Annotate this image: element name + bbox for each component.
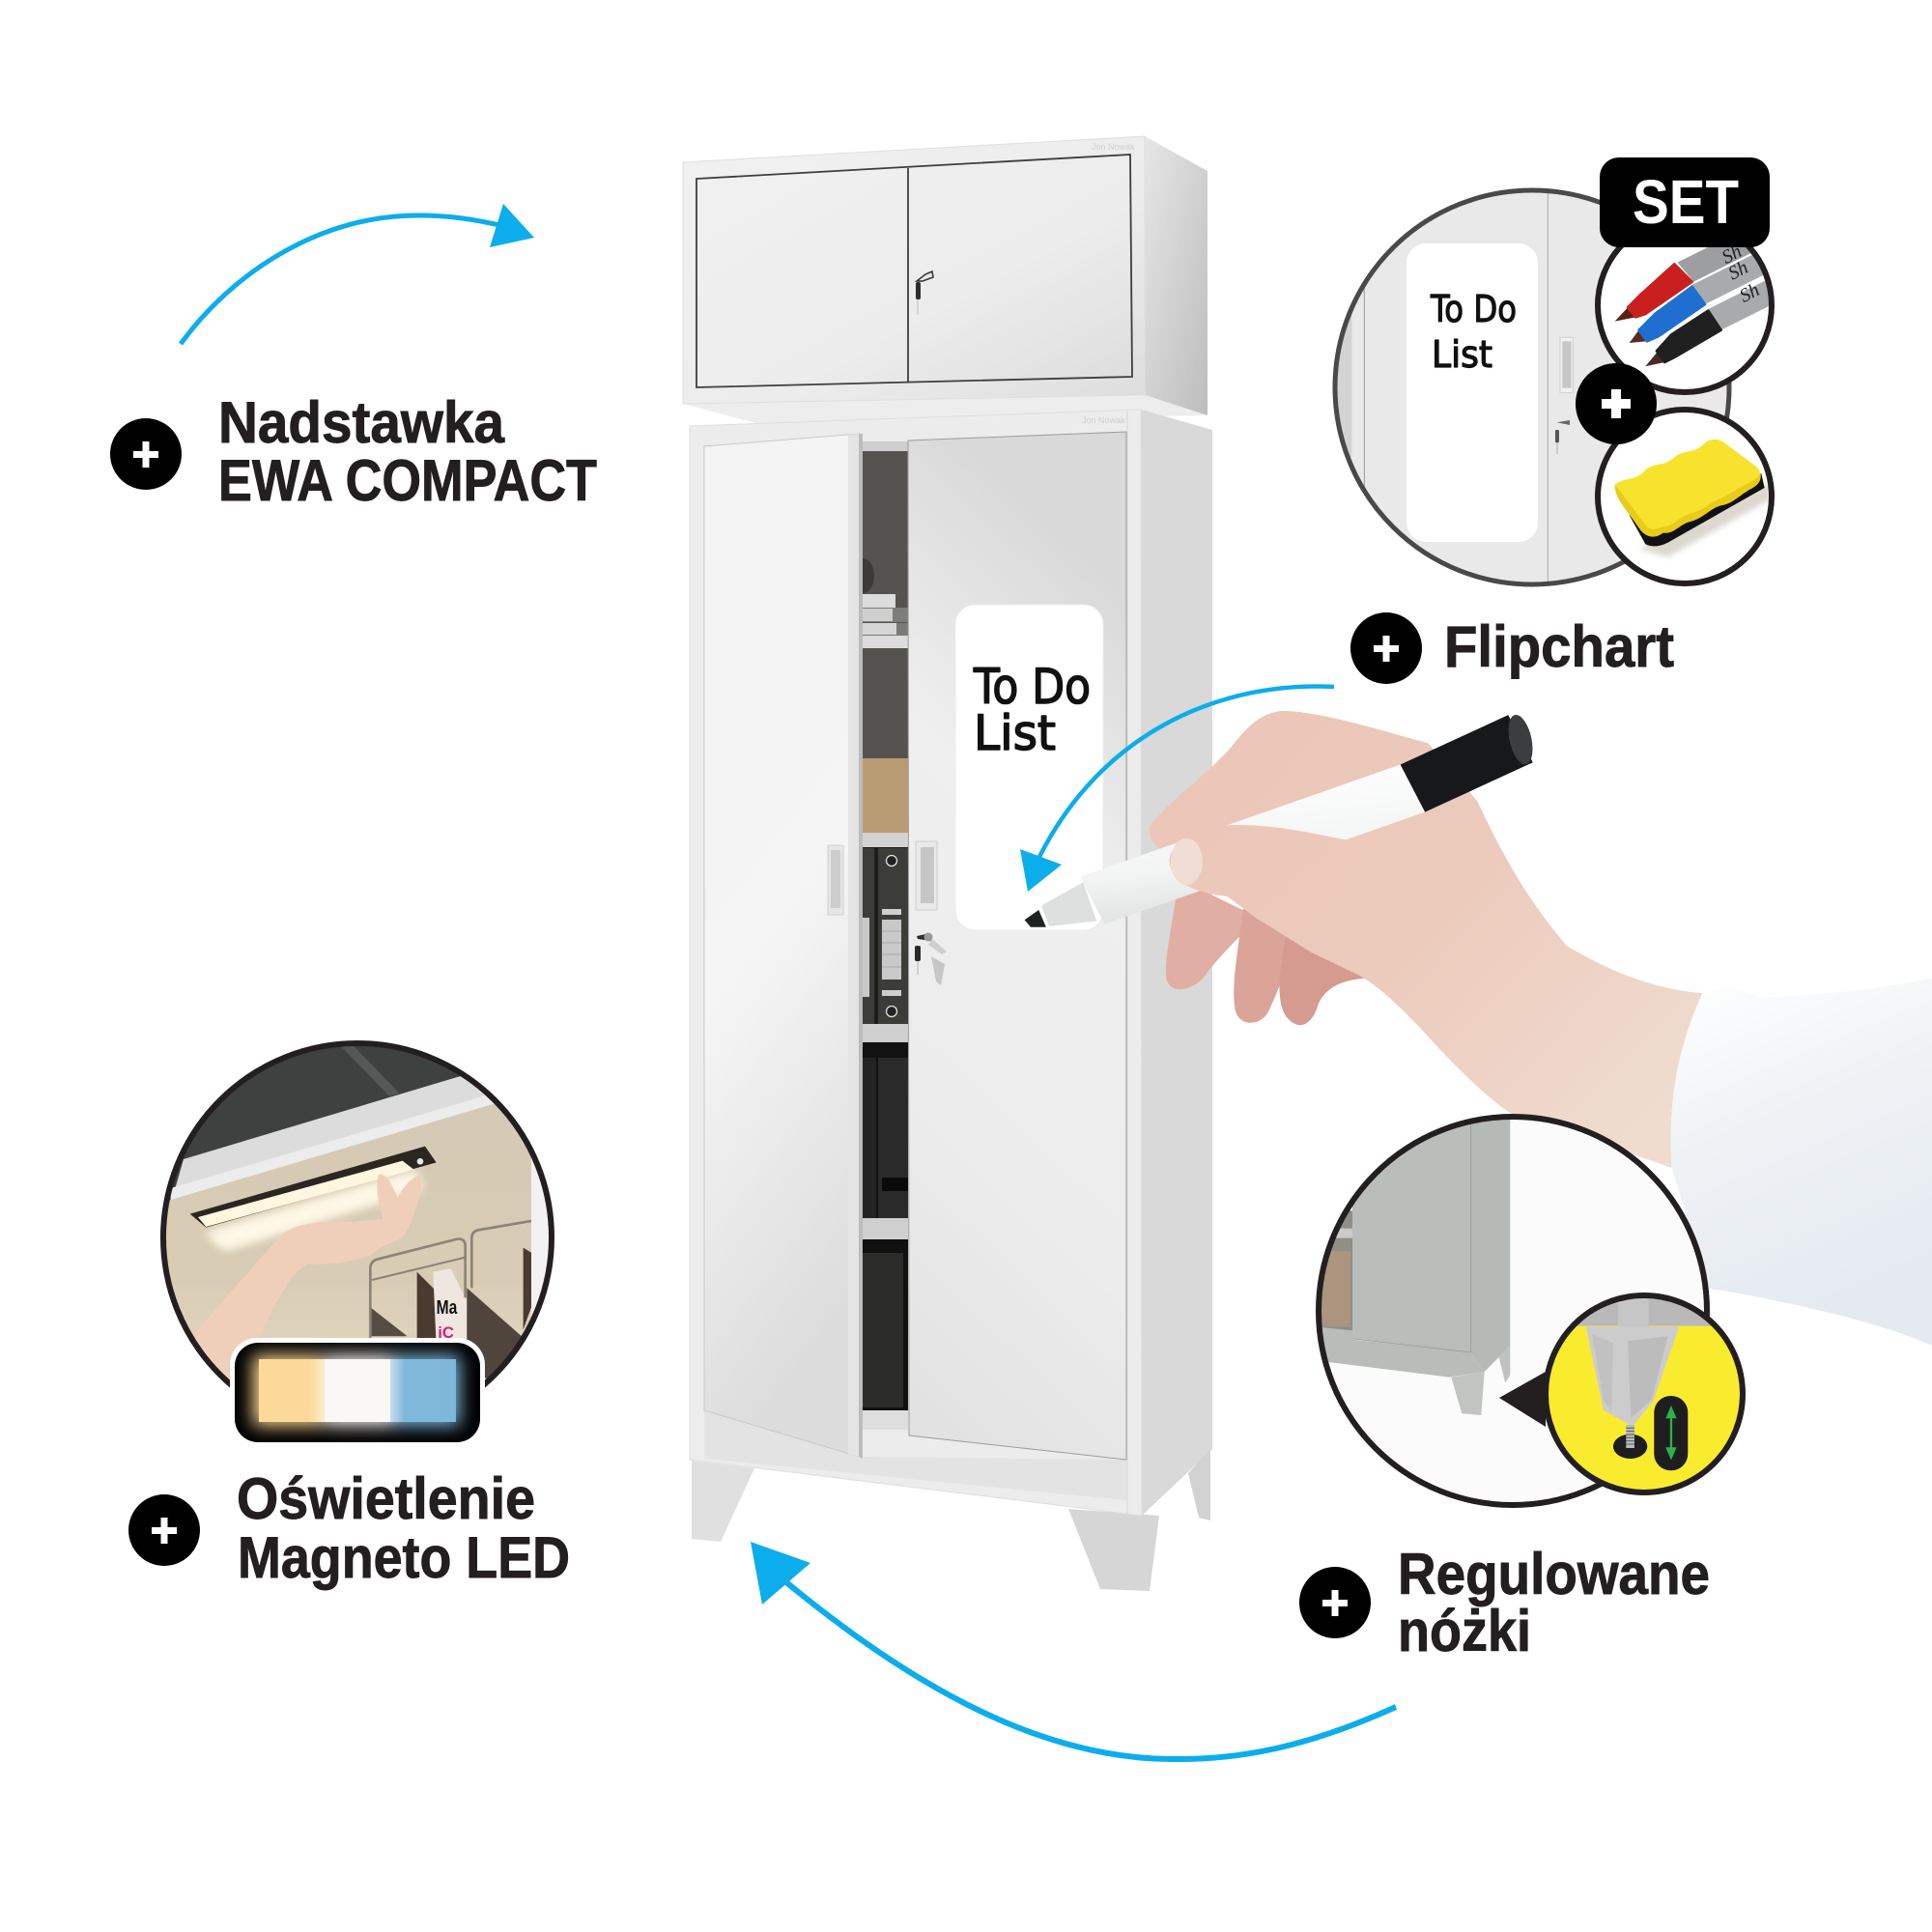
badge: SET: SET (1633, 167, 1739, 237)
panel: markers circle (1595, 247, 1775, 395)
left foot (692, 1461, 754, 1542)
label: Flipchart (1350, 612, 1674, 684)
panel: flipchart detail circle (1323, 167, 1729, 589)
shelf racks: iC (438, 1323, 454, 1342)
blue marker: Sh (1725, 257, 1751, 284)
whiteboard close-up: List (1432, 333, 1492, 376)
arm and hand (184, 1175, 422, 1384)
marker (1025, 714, 1537, 927)
cabinet top unit: Nadstawka: Jon Nowak (1092, 142, 1135, 152)
binders (863, 847, 908, 1024)
label: Nadstawka EWA COMPACT: EWA COMPACT (218, 448, 597, 513)
levelling foot (1613, 1435, 1647, 1459)
black binders lower shelf (863, 1042, 908, 1218)
label: Flipchart: Flipchart (1444, 614, 1674, 679)
up-down arrow pill (1654, 1396, 1688, 1470)
right door handle (916, 841, 937, 910)
label: Regulowane nozki: Regulowane (1398, 1542, 1710, 1606)
label: Oswietlenie Magneto LED: Oświetlenie (237, 1466, 535, 1531)
cabinet main body: Jon Nowak (1082, 415, 1125, 425)
flipchart whiteboard on door: To Do (973, 659, 1091, 715)
whiteboard close-up (1406, 243, 1538, 542)
icon: plus (1299, 1567, 1371, 1638)
arrow: nadstawka (181, 204, 534, 344)
panel: adjustable feet circle (1314, 1111, 1746, 1505)
right foot (1068, 1509, 1159, 1591)
badge: SET (1600, 157, 1770, 247)
left door handle (828, 845, 843, 915)
red marker: Sh (1719, 241, 1746, 269)
flipchart whiteboard on door (955, 605, 1103, 930)
hand with marker (1025, 711, 1932, 1346)
label: Nadstawka EWA COMPACT: Nadstawka (218, 390, 505, 455)
arrow: regulowane nozki (751, 1542, 1396, 1759)
icon: plus (1350, 612, 1422, 684)
lower fingers (1166, 879, 1259, 989)
black marker: Sh (1736, 279, 1763, 307)
thumb over marker (1169, 825, 1459, 952)
flipchart whiteboard on door: List (974, 705, 1056, 761)
back of hand and wrist (1150, 711, 1702, 1168)
cabinet main body (690, 410, 1212, 1591)
cabinet top unit: Nadstawka (683, 136, 1208, 423)
black marker (1645, 280, 1769, 367)
pointer triangle (1499, 1372, 1546, 1427)
panel: eraser circle (1598, 410, 1772, 583)
label: Oswietlenie Magneto LED (128, 1466, 570, 1590)
icon: plus (110, 418, 182, 490)
colour temperature badge (230, 1338, 485, 1446)
shelf racks: Ma (437, 1296, 458, 1319)
red marker (1615, 247, 1750, 322)
whiteboard close-up: To Do (1430, 288, 1517, 330)
label: Oswietlenie Magneto LED: Magneto LED (238, 1525, 570, 1590)
blue marker (1629, 255, 1764, 343)
label: Nadstawka EWA COMPACT (110, 390, 597, 513)
shirt sleeve (1671, 978, 1932, 1346)
panel: LED lighting circle (160, 1040, 554, 1442)
wooden box (863, 758, 908, 833)
lock and key (915, 933, 947, 985)
label: Regulowane nozki: nóżki (1398, 1599, 1531, 1663)
icon: plus between set items (1576, 363, 1657, 444)
shelf racks (370, 1221, 531, 1378)
icon: plus (128, 1494, 200, 1566)
cabinet interior with shelves (851, 441, 908, 1430)
label: Regulowane nozki (1299, 1542, 1710, 1663)
LED bar (190, 1147, 437, 1228)
yellow inset: leg detail (1539, 1292, 1746, 1492)
back foot (1188, 1449, 1210, 1520)
right door (908, 432, 1126, 1460)
arrow: flipchart (1020, 687, 1334, 892)
left door (704, 434, 859, 1457)
